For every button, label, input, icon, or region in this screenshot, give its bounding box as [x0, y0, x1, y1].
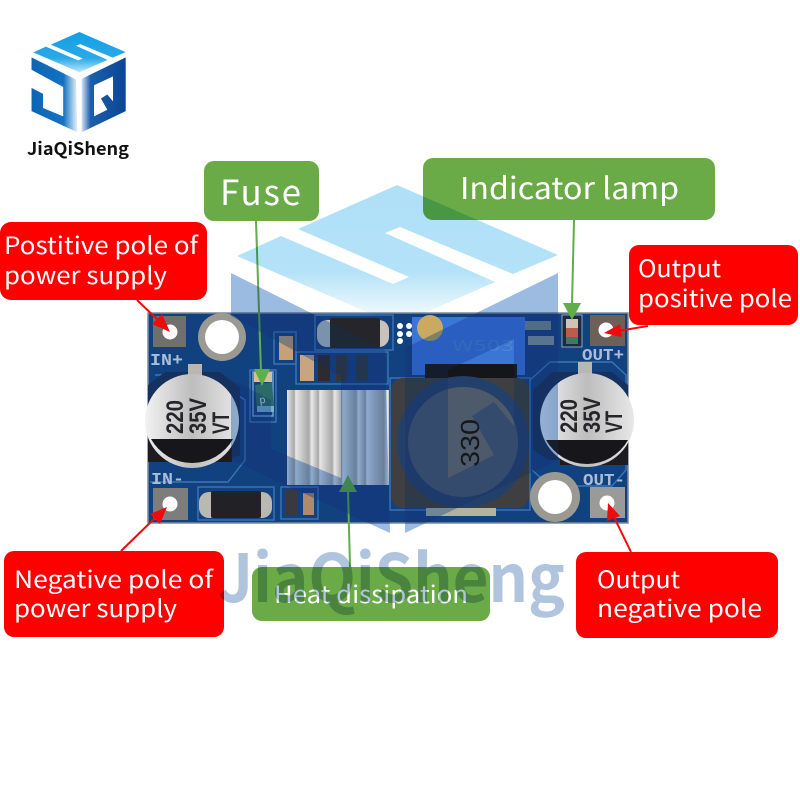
arrow: heat dissipation	[339, 475, 357, 567]
watermark right face tint	[405, 273, 558, 533]
arrow: fuse	[254, 221, 270, 386]
label: negative pole of power supply: Negative pole of	[14, 560, 214, 595]
indicator LED	[562, 315, 582, 347]
mounting hole bottom	[530, 472, 580, 522]
IN- silk label: IN-	[151, 471, 184, 490]
watermark left face	[231, 273, 390, 533]
label: output positive pole: positive pole	[638, 279, 792, 314]
label: negative pole of power supply	[4, 551, 224, 637]
arrow: negative pole	[121, 507, 167, 551]
label: indicator lamp	[423, 158, 715, 220]
label: output positive pole	[629, 245, 798, 325]
label: positive pole of power supply: power supply	[4, 256, 168, 291]
label: output negative pole	[576, 552, 778, 638]
top diode	[317, 318, 389, 348]
watermark right face	[405, 273, 558, 533]
watermark: large translucent cube	[231, 185, 558, 533]
input capacitor: 220	[162, 400, 189, 434]
fuse component	[253, 372, 274, 416]
IN+ pad and hole	[153, 316, 186, 347]
arrow: output positive pole	[604, 324, 648, 337]
arrow: indicator lamp	[563, 220, 581, 320]
label: negative pole of power supply: power supply	[14, 589, 178, 624]
label: heat dissipation	[252, 567, 490, 621]
label: positive pole of power supply: Postitive pole of	[4, 226, 199, 261]
output capacitor: 35V	[579, 397, 606, 433]
input capacitor: VT	[208, 412, 235, 434]
small resistors and capacitors	[279, 321, 554, 516]
potentiometer	[412, 315, 525, 379]
arrow: output negative pole	[607, 503, 631, 552]
OUT- silk label: OUT-	[583, 472, 625, 491]
bottom diode	[199, 491, 272, 518]
OUT+ silk label: OUT+	[582, 347, 624, 366]
label: indicator lamp: Indicator lamp	[460, 164, 679, 208]
potentiometer: W503	[452, 335, 514, 356]
label: fuse: Fuse	[220, 165, 301, 216]
label: positive pole of power supply	[0, 222, 207, 300]
IN+ silk label: IN+	[150, 352, 183, 371]
input capacitor	[145, 364, 240, 468]
circuit board module	[145, 313, 634, 523]
heat sink	[287, 390, 389, 485]
watermark text: JiaQiSheng	[218, 526, 565, 622]
OUT- pad and hole	[590, 487, 625, 518]
IN- pad and hole	[153, 488, 188, 520]
mounting hole top	[198, 313, 246, 361]
watermark left face tint	[231, 273, 390, 533]
label: fuse	[204, 161, 319, 221]
inductor 330: 330	[455, 419, 485, 467]
input capacitor: 35V	[185, 398, 212, 434]
output capacitor: VT	[601, 411, 628, 433]
logo wordmark: JiaQiSheng	[27, 136, 130, 161]
board traces	[150, 315, 626, 520]
logo: JiaQiSheng cube and wordmark	[27, 32, 130, 161]
label: output negative pole: Output	[597, 560, 680, 595]
fuse component: p	[258, 391, 266, 407]
board substrate	[148, 313, 628, 523]
OUT+ pad and hole	[590, 315, 625, 346]
label: heat dissipation: Heat dissipation	[274, 575, 468, 610]
label: output negative pole: negative pole	[597, 589, 762, 624]
arrow: positive pole	[137, 300, 170, 332]
label: output positive pole: Output	[638, 249, 721, 284]
icon: cube logo	[32, 32, 126, 132]
watermark top face	[237, 185, 558, 325]
inductor 330	[391, 376, 529, 516]
output capacitor	[533, 362, 634, 467]
output capacitor: 220	[556, 399, 583, 433]
